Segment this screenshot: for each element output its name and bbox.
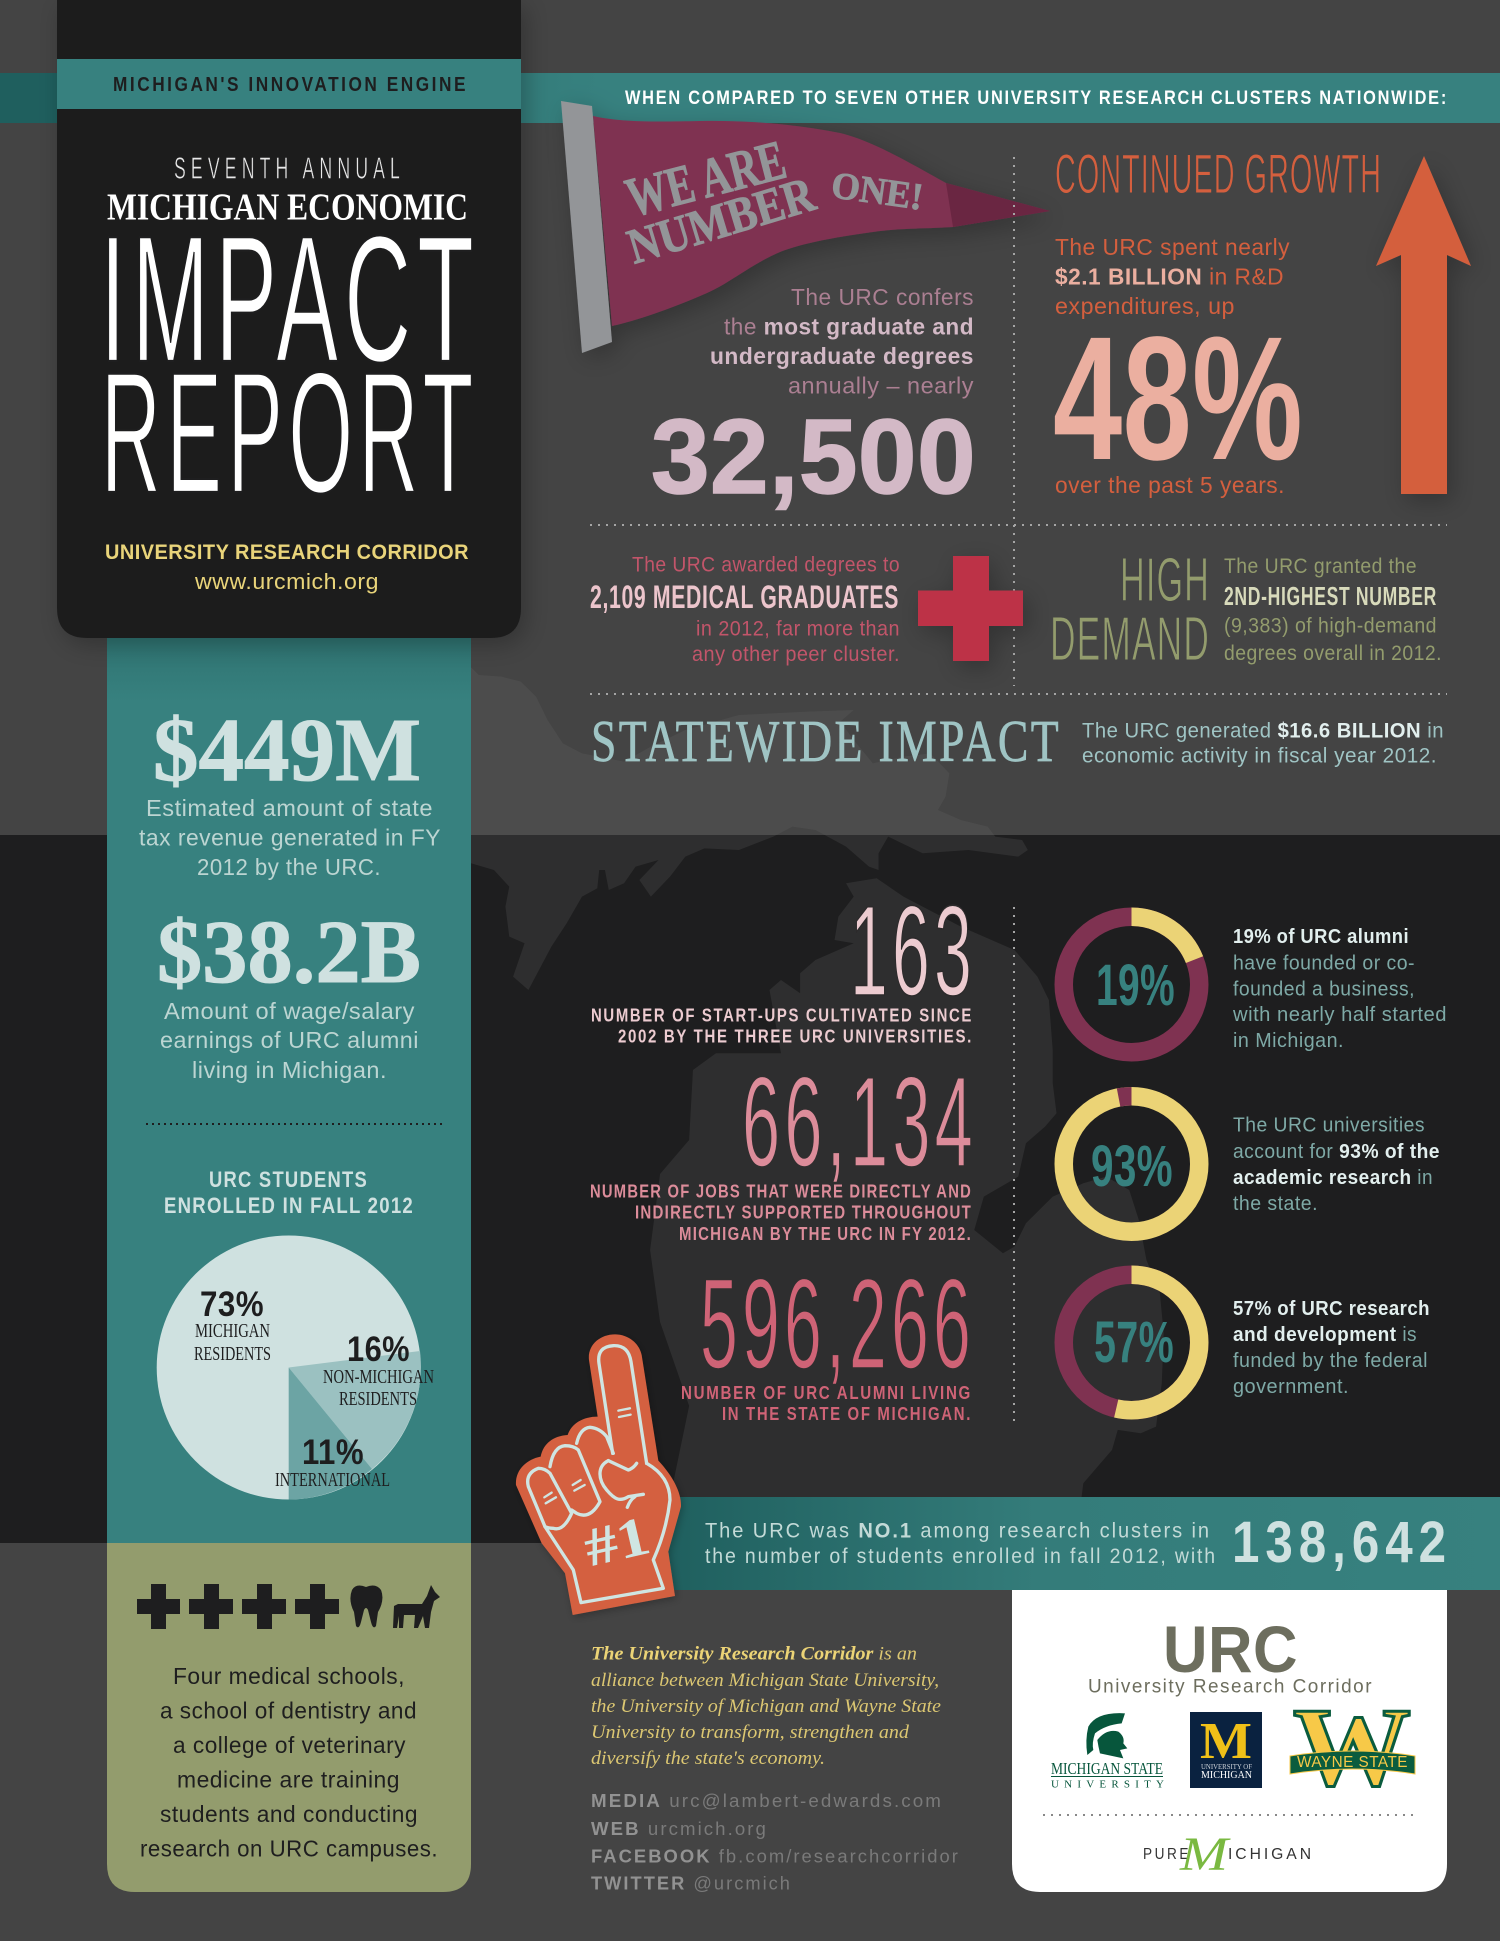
text: contact details: WEB urcmich.org: [591, 1819, 768, 1839]
pie chart: students: MICHIGAN: [195, 1320, 270, 1342]
donut chart: 57%: 57%: [1094, 1310, 1174, 1375]
text: medical schools: medicine are training: [177, 1766, 400, 1792]
teal header strip: [57, 59, 521, 109]
panel: title block: [57, 0, 521, 638]
text: alumni founders: in Michigan.: [1233, 1029, 1344, 1052]
logo: Pure Michigan: [1143, 1828, 1314, 1881]
text: medical graduates: The URC awarded degrees to: [632, 554, 900, 576]
logo: URC: University Research Corridor: [1088, 1676, 1373, 1698]
text: academic research: [1233, 1114, 1440, 1215]
text: statewide impact: The URC generated $16.6 BILLION in: [1082, 718, 1444, 742]
stat: wages: earnings of URC alumni: [160, 1027, 419, 1053]
pie chart: students: [157, 1236, 434, 1500]
text: medical schools: Four medical schools,: [173, 1663, 405, 1689]
text: continued growth: [1053, 142, 1382, 498]
dotted vertical dividers: [1013, 157, 1015, 1423]
icon: foam finger: #1: [578, 1504, 655, 1578]
stat: jobs: 66,134: [742, 1051, 977, 1194]
stat: start-ups: 163: [850, 880, 976, 1023]
logo: URC: URC: [1163, 1612, 1298, 1686]
logo: University of Michigan: MICHIGAN: [1201, 1770, 1252, 1781]
icons: crosses, tooth, dog: [137, 1584, 440, 1629]
stat: start-ups: 2002 BY THE THREE URC UNIVERSITIES.: [618, 1026, 973, 1046]
teal banner: number one enrollment: the number of students enrolled in fall 2012, with: [705, 1545, 1217, 1568]
text: high demand: HIGH: [1120, 546, 1210, 615]
text: high demand: The URC granted the: [1224, 555, 1417, 578]
text: about the corridor: University to transform, strengthen and: [591, 1722, 910, 1743]
text: high demand: degrees overall in 2012.: [1224, 642, 1442, 665]
pie chart: students: NON-MICHIGAN: [323, 1366, 434, 1388]
donut chart: 19%: [1064, 917, 1199, 1052]
text: federal funding: and development is: [1233, 1323, 1417, 1346]
stat: jobs: [590, 1051, 977, 1244]
stat: alumni: 596,266: [700, 1253, 975, 1396]
text: contact details: FACEBOOK fb.com/researchcorridor: [591, 1846, 960, 1866]
title: [100, 150, 480, 529]
stat: tax revenue: 2012 by the URC.: [197, 854, 381, 880]
text: medical schools: a college of veterinary: [173, 1732, 406, 1758]
text: alumni founders: have founded or co-: [1233, 952, 1415, 974]
stat: wages: $38.2B: [157, 903, 421, 1002]
text: continued growth: The URC spent nearly: [1055, 234, 1290, 260]
icon: foam finger: [516, 1334, 681, 1615]
teal banner: when compared: [0, 73, 1500, 123]
text: statewide impact: economic activity in fiscal year 2012.: [1082, 744, 1437, 768]
text: high demand: [1050, 546, 1442, 674]
pie chart: students: 11%: [302, 1433, 364, 1472]
dark middle band: [0, 835, 1500, 1543]
pennant: we are number one: WE ARE: [620, 129, 792, 230]
donut chart: 93%: [1052, 1085, 1211, 1243]
logo: University of Michigan: M: [1200, 1713, 1252, 1770]
panel: medical schools: [107, 1543, 471, 1892]
logo: Michigan State: MICHIGAN STATE: [1051, 1759, 1163, 1778]
arrow: growth: [1376, 156, 1471, 494]
logo: University of Michigan: [1190, 1712, 1262, 1788]
teal banner: number one enrollment: The URC was NO.1 among research clusters in: [705, 1520, 1211, 1542]
text: statewide impact: STATEWIDE IMPACT: [591, 708, 1061, 774]
pennant: we are number one: [561, 101, 1050, 353]
stat: alumni: [681, 1253, 975, 1424]
stat: tax revenue: [139, 701, 441, 880]
text: continued growth: expenditures, up: [1055, 293, 1235, 319]
text: medical schools: a school of dentistry and: [160, 1698, 417, 1724]
stat: wages: [157, 903, 421, 1083]
text: academic research: the state.: [1233, 1192, 1318, 1215]
icon: red cross: [918, 556, 1023, 661]
pie chart: students: RESIDENTS: [194, 1343, 271, 1365]
text: graduate degrees: annually – nearly: [788, 372, 974, 398]
panel: white logo card: [1012, 1590, 1447, 1892]
text: continued growth: $2.1 BILLION in R&D: [1055, 264, 1284, 290]
text: medical graduates: [590, 554, 900, 666]
text: academic research: The URC universities: [1233, 1114, 1425, 1136]
heading: students enrolled: ENROLLED IN FALL 2012: [164, 1193, 414, 1218]
text: alumni founders: with nearly half started: [1232, 1003, 1447, 1026]
logo: Michigan State: [1051, 1713, 1164, 1790]
stat: tax revenue: $449M: [153, 701, 421, 800]
pie chart: students: RESIDENTS: [339, 1388, 417, 1410]
pie chart: students: INTERNATIONAL: [275, 1469, 390, 1491]
stat: jobs: NUMBER OF JOBS THAT WERE DIRECTLY AND: [590, 1182, 972, 1202]
text: medical schools: [140, 1663, 438, 1862]
text: medical schools: students and conducting: [160, 1801, 418, 1827]
donut chart: 93%: 93%: [1091, 1134, 1173, 1199]
stat: start-ups: [591, 880, 976, 1046]
text: about the corridor: the University of Michigan and Wayne State: [591, 1696, 941, 1717]
stat: tax revenue: Estimated amount of state: [146, 795, 433, 821]
text: alumni founders: 19% of URC alumni: [1233, 925, 1409, 948]
text: high demand: DEMAND: [1050, 605, 1210, 674]
text: contact details: TWITTER @urcmich: [591, 1874, 792, 1894]
stat: jobs: MICHIGAN BY THE URC IN FY 2012.: [679, 1224, 972, 1244]
pie chart: students: 73%: [200, 1285, 264, 1324]
logo: Pure Michigan: M: [1179, 1828, 1232, 1881]
text: academic research: account for 93% of the: [1233, 1140, 1440, 1163]
teal header strip: MICHIGAN'S INNOVATION ENGINE: [113, 73, 468, 96]
text: about the corridor: alliance between Michigan State University,: [591, 1670, 939, 1691]
stat: wages: living in Michigan.: [192, 1057, 387, 1083]
stat: start-ups: NUMBER OF START-UPS CULTIVATED SINCE: [591, 1006, 973, 1026]
text: federal funding: [1233, 1297, 1430, 1398]
text: about the corridor: The University Research Corridor is an: [591, 1644, 917, 1664]
university research corridor link: UNIVERSITY RESEARCH CORRIDOR: [105, 540, 469, 564]
logo: Wayne State: W: [1293, 1686, 1411, 1810]
text: medical schools: research on URC campuses.: [140, 1836, 438, 1862]
university research corridor link: www.urcmich.org: [194, 569, 379, 594]
text: alumni founders: [1232, 925, 1447, 1052]
text: medical graduates: in 2012, far more than: [696, 618, 900, 640]
Michigan map silhouette: [471, 835, 1164, 1497]
text: alumni founders: founded a business,: [1233, 978, 1415, 1000]
stat: alumni: IN THE STATE OF MICHIGAN.: [722, 1404, 972, 1424]
stat: tax revenue: tax revenue generated in FY: [139, 824, 441, 850]
pie chart: students: 16%: [347, 1330, 410, 1369]
logo: University of Michigan: UNIVERSITY OF: [1201, 1762, 1252, 1771]
text: federal funding: funded by the federal: [1233, 1349, 1428, 1372]
panel: title block: REPORT: [101, 337, 479, 529]
teal banner: number one enrollment: [660, 1497, 1500, 1590]
text: continued growth: 48%: [1053, 301, 1303, 497]
pennant: we are number one: NUMBER: [621, 165, 822, 275]
text: graduate degrees: [651, 284, 976, 516]
text: federal funding: 57% of URC research: [1233, 1297, 1430, 1320]
text: about the corridor: diversify the state's economy.: [591, 1748, 825, 1769]
stat: wages: Amount of wage/salary: [164, 998, 415, 1024]
heading: students enrolled: URC STUDENTS: [209, 1167, 368, 1192]
donut chart: 19%: 19%: [1096, 953, 1175, 1018]
teal banner: number one enrollment: 138,642: [1232, 1510, 1452, 1575]
title: IMPACT: [100, 199, 480, 400]
text: contact details: MEDIA urc@lambert-edwards.com: [591, 1791, 943, 1811]
title: MICHIGAN ECONOMIC: [107, 186, 468, 228]
text: graduate degrees: the most graduate and: [724, 314, 974, 340]
dotted horizontal dividers: [590, 525, 1447, 694]
stat: jobs: INDIRECTLY SUPPORTED THROUGHOUT: [635, 1202, 972, 1222]
logo: Pure Michigan: ICHIGAN: [1228, 1846, 1314, 1863]
logo: Wayne State: WAYNE STATE: [1297, 1754, 1408, 1771]
text: graduate degrees: The URC confers: [791, 284, 974, 310]
donut chart: 57%: [1064, 1275, 1199, 1410]
text: medical graduates: any other peer cluster.: [692, 643, 900, 666]
panel: teal statistics column: [107, 638, 471, 1543]
text: contact details: [591, 1791, 960, 1894]
heading: students enrolled: [164, 1167, 414, 1218]
text: continued growth: over the past 5 years.: [1055, 472, 1285, 498]
logo: Michigan State: UNIVERSITY: [1051, 1778, 1164, 1790]
text: federal funding: government.: [1233, 1375, 1349, 1398]
logo: Pure Michigan: PURE: [1143, 1846, 1191, 1863]
text: academic research: academic research in: [1233, 1166, 1433, 1189]
pennant: we are number one: ONE!: [829, 164, 926, 219]
text: medical graduates: 2,109 MEDICAL GRADUATES: [590, 579, 899, 615]
text: graduate degrees: undergraduate degrees: [710, 343, 974, 369]
logo: URC: [1088, 1612, 1373, 1698]
university research corridor link: [105, 540, 469, 594]
title: SEVENTH ANNUAL: [174, 150, 405, 186]
text: high demand: (9,383) of high-demand: [1224, 614, 1437, 638]
stat: alumni: NUMBER OF URC ALUMNI LIVING: [681, 1383, 972, 1403]
text: graduate degrees: 32,500: [651, 398, 976, 516]
text: about the corridor: [591, 1644, 941, 1769]
